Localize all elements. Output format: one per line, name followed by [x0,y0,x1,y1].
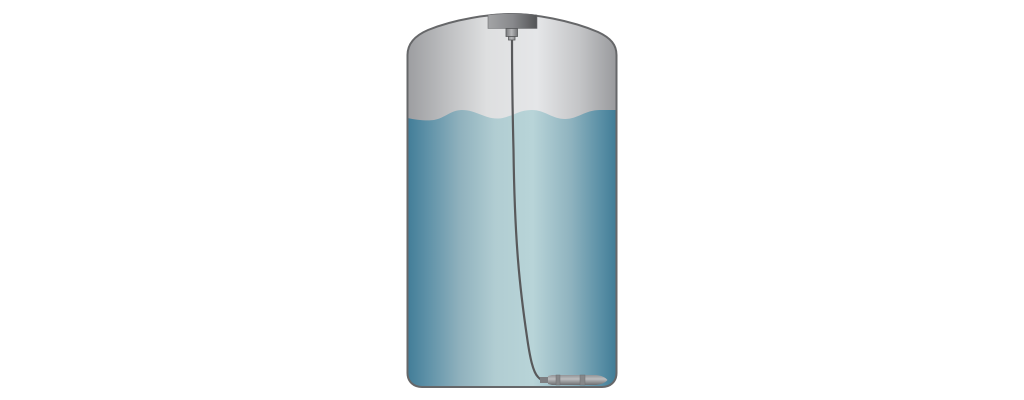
sensor cable [512,38,546,380]
mounting cap [488,14,537,28]
tank outline [408,14,616,387]
submersible pressure sensor [540,375,608,385]
top mount [488,14,537,40]
tank air space [408,14,616,122]
water body [408,110,616,387]
cable gland [506,28,518,40]
